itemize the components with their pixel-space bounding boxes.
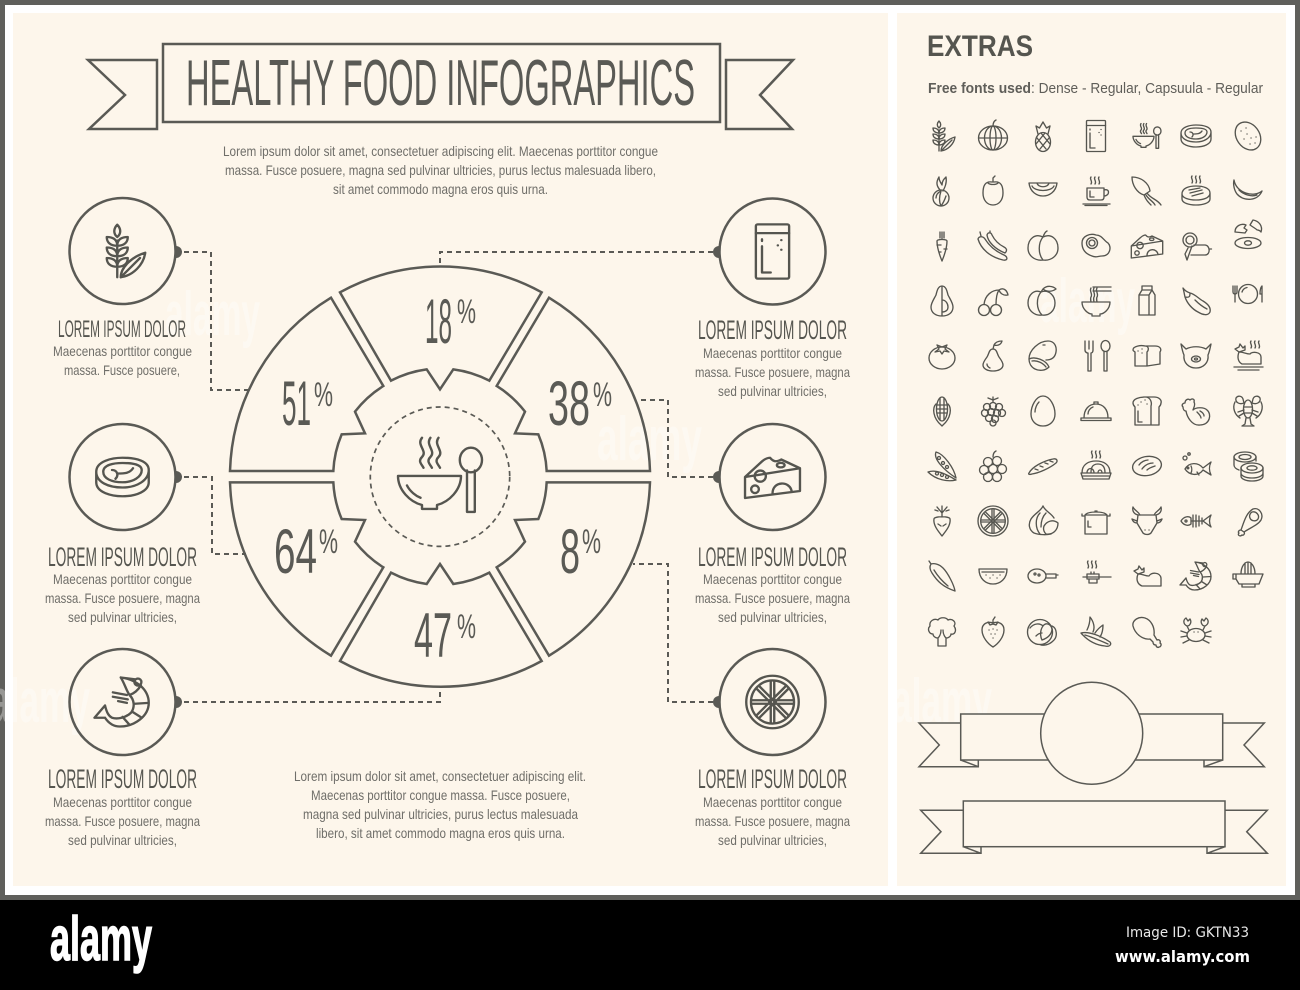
intro text block — [223, 143, 658, 197]
icon: fish — [1183, 453, 1211, 475]
center dashed circle — [370, 407, 510, 546]
icon: onion — [933, 177, 949, 206]
description: massa. Fusce posuere, magna — [45, 590, 200, 606]
icon: chicken — [1134, 566, 1161, 586]
description: sed pulvinar ultricies, — [68, 609, 177, 625]
icon: cloche — [1081, 402, 1111, 420]
icon: fork and spoon — [1085, 340, 1110, 371]
plain ribbon — [921, 801, 1267, 853]
icon: potato — [1230, 117, 1266, 155]
description — [695, 571, 850, 625]
value 64%: 64 — [274, 517, 317, 587]
faint watermarks: alamy — [1040, 267, 1135, 336]
description: massa. Fusce posuere, magna — [695, 590, 850, 606]
icon: shrimp — [1180, 562, 1211, 590]
icon: grapes — [982, 397, 1006, 426]
icon: shrimp — [94, 678, 149, 726]
icon: cabbage — [1028, 620, 1056, 645]
faint watermarks: alamy — [597, 405, 702, 474]
description: Maecenas porttitor congue — [703, 571, 842, 587]
icon: cracked egg — [1235, 220, 1262, 248]
segment 18% — [340, 267, 542, 389]
icon: carrot — [937, 232, 947, 261]
callout: wheat — [53, 198, 192, 378]
description — [45, 794, 200, 848]
icon: hen — [1182, 399, 1210, 425]
closing text block — [294, 768, 586, 841]
closing text block: libero, sit amet commodo magna eros quis urna. — [316, 825, 565, 841]
icon: mango — [1029, 341, 1056, 370]
icon: glass — [756, 224, 789, 279]
icon: glass — [1086, 120, 1106, 152]
description — [53, 343, 192, 378]
description: Maecenas porttitor congue — [703, 345, 842, 361]
icon: meat — [96, 458, 149, 496]
icon: wheat — [107, 225, 145, 277]
icon: crab — [1181, 618, 1211, 643]
closing text block: Lorem ipsum dolor sit amet, consectetuer adipiscing elit. — [294, 768, 586, 784]
icon: corn — [934, 397, 950, 426]
segment 47% — [340, 564, 542, 687]
heading: LOREM IPSUM DOLOR — [698, 542, 847, 572]
icon: cow — [1132, 507, 1162, 534]
fonts note: Free fonts used — [928, 80, 1031, 97]
icon: chili — [929, 561, 955, 591]
title: HEALTHY FOOD INFOGRAPHICS — [186, 46, 695, 119]
description: massa. Fusce posuere, magna — [45, 813, 200, 829]
description: sed pulvinar ultricies, — [718, 383, 827, 399]
icon: noodles — [1082, 287, 1111, 316]
description — [695, 794, 850, 848]
heading: LOREM IPSUM DOLOR — [698, 764, 847, 794]
percentage values — [274, 287, 612, 671]
dashed connectors — [184, 252, 713, 702]
icon: pot — [1082, 511, 1110, 534]
icon: bread — [1133, 346, 1161, 366]
website: www.alamy.com — [1115, 947, 1250, 966]
callout: citrus — [695, 649, 850, 848]
icon grid — [928, 117, 1266, 647]
icon: pumpkin — [978, 120, 1008, 150]
icon: pea pods — [978, 231, 1007, 260]
value 51%: 51 — [282, 369, 311, 439]
faint watermarks: alamy — [892, 667, 992, 736]
icon: beet — [934, 506, 950, 536]
description: Maecenas porttitor congue — [53, 571, 192, 587]
icon: toast — [1133, 397, 1161, 425]
icon: cans — [1234, 452, 1263, 481]
icon: citrus — [978, 506, 1008, 536]
icon: cheese — [1131, 235, 1163, 258]
icon: meat — [1181, 125, 1211, 147]
icon: frying pan — [1028, 569, 1058, 583]
icon: citrus — [746, 676, 799, 728]
value 47%: 47 — [414, 601, 452, 671]
callout: wheat: LOREM IPSUM DOLOR — [58, 316, 186, 343]
image id: Image ID: GKTN33 — [1126, 925, 1249, 941]
icon: cheese — [745, 458, 800, 498]
icon: ham — [1238, 509, 1262, 536]
chart: segmented ring — [230, 267, 650, 687]
icon: baguette — [1029, 459, 1057, 474]
icon: soup bowl and spoon — [398, 438, 482, 512]
icon: skewer — [1083, 561, 1111, 583]
callout: meat — [45, 424, 200, 625]
icon: pineapple — [1036, 122, 1050, 152]
description: Maecenas porttitor congue — [703, 794, 842, 810]
heading: LOREM IPSUM DOLOR — [48, 542, 197, 572]
value 18%: 18 — [425, 287, 452, 357]
title banner — [88, 44, 793, 129]
icon: wheat — [933, 121, 955, 151]
footer bar — [0, 900, 1300, 990]
icon: bell pepper — [983, 176, 1003, 205]
segment 64% — [230, 482, 383, 656]
icon: garlic — [1029, 506, 1058, 535]
icon: crescent melon — [1234, 180, 1262, 199]
value 8%: 8 — [560, 517, 580, 587]
description: sed pulvinar ultricies, — [718, 832, 827, 848]
icon: bananas — [1081, 617, 1111, 646]
icon: grilled steak — [1182, 176, 1210, 205]
value 38%: % — [593, 376, 612, 414]
callout: shrimp — [45, 649, 200, 848]
icon: pear — [983, 341, 1003, 371]
intro text block: massa. Fusce posuere, magna sed pulvinar ultricies, purus lectus malesuada libero, — [225, 162, 656, 178]
fonts note — [928, 80, 1263, 97]
icon: apricot — [1028, 286, 1056, 315]
icon: fish bone — [1181, 515, 1211, 527]
description: Maecenas porttitor congue — [53, 794, 192, 810]
heading: LOREM IPSUM DOLOR — [48, 764, 197, 794]
intro text block: Lorem ipsum dolor sit amet, consectetuer adipiscing elit. Maecenas porttitor congue — [223, 143, 658, 159]
description: sed pulvinar ultricies, — [68, 832, 177, 848]
description: massa. Fusce posuere, magna — [695, 364, 850, 380]
icon: drumstick — [1133, 617, 1161, 647]
icon: sausage — [1183, 233, 1212, 260]
icon: pig — [1181, 344, 1211, 368]
icon: peach — [1028, 231, 1058, 260]
icon: squid — [1132, 177, 1161, 205]
icon: loaf — [1131, 454, 1163, 478]
value 51%: % — [314, 376, 333, 414]
value 47%: % — [457, 608, 476, 646]
intro text block: sit amet commodo magna eros quis urna. — [333, 181, 548, 197]
icon: juicer — [1233, 562, 1263, 587]
icon: watermelon — [979, 569, 1007, 584]
icon: broccoli — [929, 618, 955, 646]
callout: cheese — [695, 424, 850, 625]
value 64%: % — [319, 523, 338, 561]
icon: melon slice — [1029, 183, 1057, 196]
icon: roast — [1234, 341, 1263, 370]
description: Maecenas porttitor congue — [53, 343, 192, 359]
icon: eggplant — [1183, 288, 1210, 315]
panel: extras background — [897, 13, 1286, 886]
icon: fried egg — [1082, 234, 1110, 257]
description: sed pulvinar ultricies, — [718, 609, 827, 625]
icon: avocado — [931, 286, 953, 316]
callout: glass — [695, 198, 850, 399]
icon: cherries — [978, 289, 1008, 316]
icon: soup bowl — [1133, 124, 1161, 148]
icon: peas — [928, 452, 956, 481]
segment 8% — [497, 482, 650, 656]
icon: milk carton — [1139, 286, 1155, 315]
description — [45, 571, 200, 625]
heading: LOREM IPSUM DOLOR — [698, 315, 847, 345]
fonts note: : Dense - Regular, Capsuula - Regular — [1031, 80, 1263, 97]
value 38%: 38 — [548, 369, 590, 439]
description: massa. Fusce posuere, — [64, 362, 180, 378]
segment 51% — [230, 298, 383, 471]
icon: plate and cutlery — [1233, 284, 1262, 304]
extras heading: EXTRAS — [927, 30, 1033, 63]
icon: strawberry — [982, 617, 1004, 647]
icon: tomato — [929, 345, 955, 369]
icon: berries — [980, 451, 1006, 482]
description: massa. Fusce posuere, magna — [695, 813, 850, 829]
icon: egg — [1031, 396, 1055, 426]
icon: coffee cup — [1083, 177, 1110, 206]
faint watermarks — [0, 267, 1135, 736]
icon: spaghetti — [1081, 451, 1111, 479]
description — [695, 345, 850, 399]
icon: lobster — [1234, 396, 1262, 426]
closing text block: Maecenas porttitor congue massa. Fusce posuere, — [311, 787, 570, 803]
footer logo: alamy — [50, 905, 152, 974]
segment 38% — [497, 298, 650, 471]
faint watermarks: alamy — [165, 280, 260, 349]
closing text block: magna sed pulvinar ultricies, purus lectus malesuada — [303, 806, 578, 822]
value 8%: % — [582, 523, 601, 561]
ribbon with circle badge — [919, 682, 1264, 784]
panel: main infographic background — [13, 13, 888, 886]
value 18%: % — [457, 293, 476, 331]
